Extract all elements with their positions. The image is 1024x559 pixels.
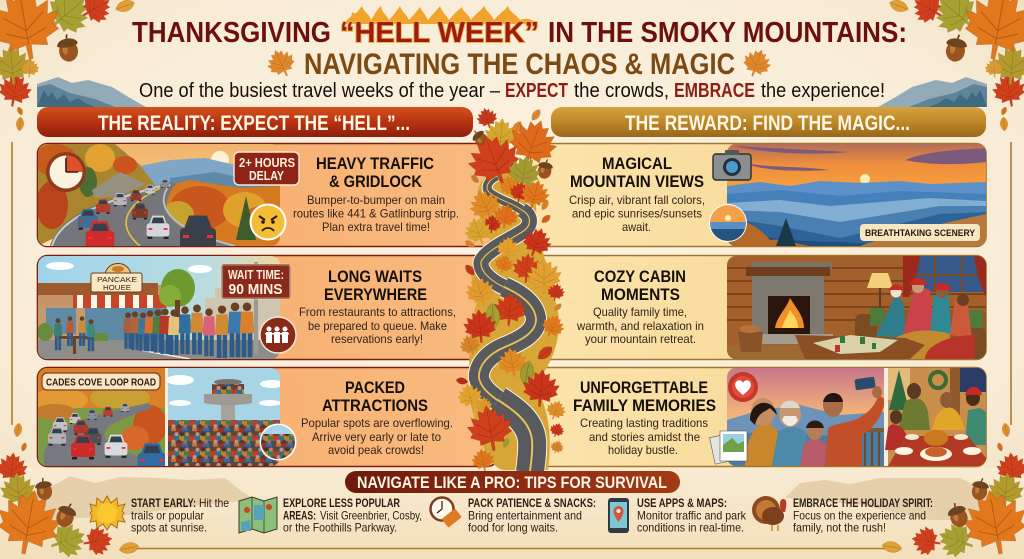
subtitle: the crowds,: [574, 80, 669, 102]
text: family memories body: Creating lasting traditions: [580, 416, 708, 430]
text: long waits body: [299, 305, 456, 346]
icon: clock and snack: [430, 498, 462, 528]
heading: heavy traffic: HEAVY TRAFFIC: [316, 155, 434, 173]
cades cove and tower scene: [38, 368, 280, 466]
banner: the reality: THE REALITY: EXPECT THE “HELL”...: [98, 112, 410, 135]
title line one end: IN THE SMOKY MOUNTAINS:: [548, 17, 907, 49]
subtitle: One of the busiest travel weeks of the year –: [139, 80, 501, 102]
text: magical views body: [569, 193, 705, 234]
family selfie and dinner scene: [727, 368, 986, 466]
text: long waits body: From restaurants to attractions,: [299, 305, 456, 319]
tip: use apps and maps: [608, 496, 746, 534]
icon: heading maple leaf right: [739, 45, 775, 81]
icon: angry face: [250, 204, 286, 240]
panel: heavy traffic: [33, 144, 498, 252]
text: use apps lines: [637, 508, 746, 534]
text: heavy traffic body: Plan extra travel time!: [322, 220, 430, 234]
heading: magical mountain views: [570, 155, 704, 191]
icon: crowd inset: [260, 424, 296, 460]
text: packed attractions body: avoid peak crowds!: [328, 443, 424, 457]
sign: wait time: [222, 262, 290, 354]
centre autumn leaf cluster: [455, 105, 568, 473]
mountains left of heading: [37, 77, 146, 107]
panel: packed attractions: [32, 368, 498, 473]
sign: wait time: 90 MINS: [228, 281, 282, 298]
text: explore areas: AREAS:: [283, 508, 316, 522]
road upper curve: [481, 210, 530, 288]
corner leaves top left: [0, 0, 136, 131]
icon: clock: [46, 152, 86, 192]
road middle curve: [479, 287, 536, 402]
heading: long waits: EVERYWHERE: [324, 286, 427, 304]
text: embrace lines: [793, 508, 926, 534]
icon: phone: [608, 498, 629, 533]
text: pack patience lines: food for long waits.: [468, 520, 558, 534]
text: packed attractions body: [301, 416, 453, 457]
text: long waits body: be prepared to queue. Make: [308, 319, 447, 333]
callout: delay: 2+ HOURS: [239, 156, 295, 170]
text: explore last line: or the Foothills Parkway.: [283, 520, 397, 534]
sign: cades cove loop road: [42, 373, 160, 390]
faded mountains bottom band right: [785, 478, 1000, 520]
heading: long waits: [324, 268, 427, 304]
corner leaves top right: [888, 0, 1024, 131]
side and bottom frame lines: [12, 142, 1011, 548]
corner leaves bottom right: [881, 422, 1024, 559]
heading: packed attractions: ATTRACTIONS: [322, 397, 428, 415]
mountains right of heading: [878, 77, 987, 107]
label: breathtaking scenery: BREATHTAKING SCENERY: [865, 228, 976, 239]
centre leaf underlay: [469, 165, 559, 470]
corner leaves bottom left: [0, 422, 140, 559]
text: pack patience: PACK PATIENCE & SNACKS:: [468, 496, 596, 510]
text: cozy cabin body: warmth, and relaxation in: [576, 319, 704, 333]
panel: magical mountain views: [530, 144, 986, 246]
icon: sun: [90, 496, 125, 530]
heading: cozy cabin: [594, 268, 686, 304]
traffic scene: [33, 144, 282, 252]
icon: map: [239, 497, 277, 533]
road top section: [487, 176, 524, 212]
text: cozy cabin body: Quality family time,: [593, 305, 687, 319]
subtitle: the experience!: [761, 80, 885, 102]
text: start early lines: spots at sunrise.: [131, 520, 207, 534]
text: family memories body: holiday bustle.: [608, 443, 678, 457]
panel: cozy cabin: [530, 256, 986, 360]
label: breathtaking scenery: [860, 224, 980, 241]
heading: cozy cabin: MOMENTS: [601, 286, 680, 304]
hell week words: “HELL WEEK”: [340, 17, 539, 49]
text: cozy cabin body: your mountain retreat.: [585, 332, 696, 346]
callout: delay: DELAY: [249, 169, 285, 183]
restaurant queue scene: [37, 256, 280, 360]
text: use apps: USE APPS & MAPS:: [637, 496, 727, 510]
banner: the reward: [551, 107, 986, 137]
icon: heading maple leaf left: [263, 44, 299, 82]
text: explore areas: Visit Greenbrier, Cosby,: [320, 508, 422, 522]
text: use apps lines: Monitor traffic and park: [637, 508, 746, 522]
text: packed attractions body: Popular spots are overflowing.: [301, 416, 453, 430]
sign: pancake house: HOUEE: [103, 283, 131, 292]
heading: magical mountain views: MOUNTAIN VIEWS: [570, 173, 704, 191]
icon: turkey: [752, 496, 786, 531]
icon: camera: [713, 150, 751, 180]
tip: start early: [90, 496, 229, 534]
text: start early lines: trails or popular: [131, 508, 204, 522]
heading: heavy traffic: & GRIDLOCK: [329, 173, 422, 191]
text: embrace: EMBRACE THE HOLIDAY SPIRIT:: [793, 496, 933, 510]
subtitle: EXPECT: [505, 80, 568, 102]
title line one: THANKSGIVING: [132, 17, 331, 49]
sign: pancake house: PANCAKE: [97, 275, 137, 284]
text: start early lines: [131, 508, 207, 534]
tip: pack patience and snacks: [430, 496, 596, 534]
heading: heavy traffic: [316, 155, 434, 191]
text: start early: Hit the: [199, 496, 229, 510]
text: pack patience lines: [468, 508, 582, 534]
banner: the reality: [37, 107, 473, 137]
icon: heart badge: [728, 372, 758, 402]
text: heavy traffic body: [293, 193, 459, 234]
text: magical views body: and epic sunrises/sunsets: [572, 206, 702, 220]
tip: embrace the holiday spirit: [752, 496, 933, 534]
sign: pancake house: [91, 264, 142, 292]
icon: photo prints: [710, 431, 747, 464]
text: explore heading line: EXPLORE LESS POPULAR: [283, 496, 400, 510]
panel: family memories: [530, 368, 986, 466]
heading: family memories: FAMILY MEMORIES: [573, 397, 716, 415]
sign: cades cove loop road: CADES COVE LOOP ROAD: [46, 376, 156, 388]
text: family memories body: [580, 416, 708, 457]
sign: wait time: WAIT TIME:: [228, 267, 284, 282]
heading: packed attractions: PACKED: [345, 379, 405, 397]
faded mountains bottom band left: [30, 476, 255, 520]
banner: the reward: THE REWARD: FIND THE MAGIC...: [625, 112, 910, 135]
text: magical views body: await.: [622, 220, 651, 234]
heading: cozy cabin: COZY CABIN: [594, 268, 686, 286]
winding road: [479, 176, 536, 472]
road lower curve: [498, 400, 532, 472]
subtitle: EMBRACE: [674, 80, 755, 102]
text: family memories body: and stories amidst the: [589, 430, 700, 444]
cabin fireplace scene: [727, 256, 986, 359]
text: cozy cabin body: [576, 305, 704, 346]
icon: queue people: [260, 317, 296, 353]
heading: family memories: UNFORGETTABLE: [580, 379, 708, 397]
text: packed attractions body: Arrive very early or late to: [312, 430, 441, 444]
heading: packed attractions: [322, 379, 428, 415]
text: use apps lines: conditions in real-time.: [637, 520, 744, 534]
heading: family memories: [573, 379, 716, 415]
title flames: [345, 6, 537, 24]
text: heavy traffic body: Bumper-to-bumper on main: [307, 193, 445, 207]
text: embrace lines: family, not the rush!: [793, 520, 886, 534]
banner: navigate like a pro: NAVIGATE LIKE A PRO: TIPS FOR SURVIVAL: [357, 474, 667, 492]
text: heavy traffic body: routes like 441 & Gatlinburg strip.: [293, 206, 459, 220]
title: [132, 6, 907, 81]
icon: sunset inset: [709, 204, 747, 242]
bottom tips band tint: [0, 468, 1024, 559]
tip: explore less popular areas: [239, 496, 422, 534]
text: embrace lines: Focus on the experience and: [793, 508, 926, 522]
callout: delay: [234, 152, 299, 185]
sunset mountain scene: [727, 144, 986, 246]
text: start early: START EARLY:: [131, 496, 196, 510]
heading: long waits: LONG WAITS: [328, 268, 422, 286]
title line two: NAVIGATING THE CHAOS & MAGIC: [304, 48, 735, 81]
text: long waits body: reservations early!: [331, 332, 423, 346]
text: magical views body: Crisp air, vibrant fall colors,: [569, 193, 705, 207]
text: pack patience lines: Bring entertainment and: [468, 508, 582, 522]
heading: magical mountain views: MAGICAL: [602, 155, 672, 173]
panel: long waits: [37, 256, 498, 360]
